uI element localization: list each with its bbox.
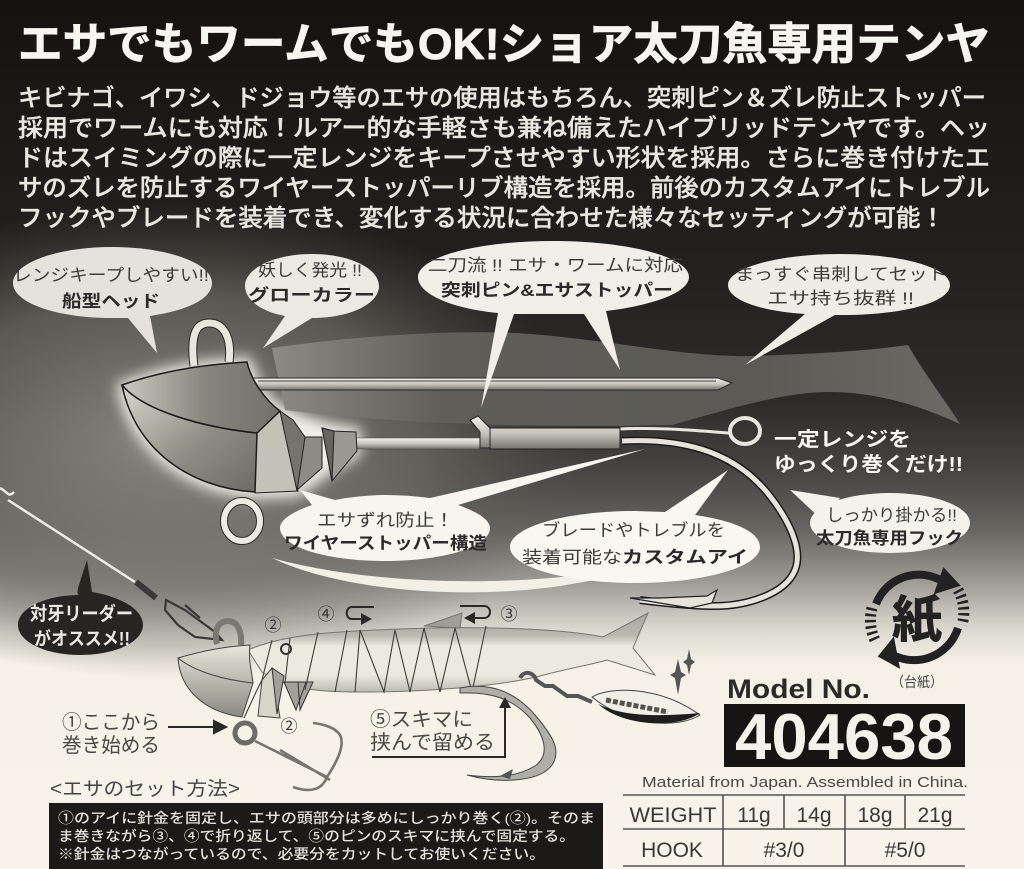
lower eye outline bbox=[224, 501, 260, 541]
callout: straight skewer bbox=[728, 254, 950, 365]
worm silhouette bbox=[272, 332, 960, 426]
lower shaft bbox=[350, 438, 490, 449]
marker ② lower: ② bbox=[280, 717, 298, 736]
marker ④ with turn arrow bbox=[318, 605, 374, 625]
callout: dedicated hook bbox=[790, 490, 970, 553]
arrow: tuck into gap bbox=[372, 697, 511, 757]
leader snap swivel bbox=[165, 600, 222, 640]
leader spring bbox=[136, 582, 156, 598]
hook barb small bbox=[500, 769, 513, 779]
rib keel bbox=[255, 411, 298, 493]
recycle paper mark: （台紙） bbox=[891, 674, 943, 690]
wire stopper sleeve bbox=[470, 416, 620, 449]
callout: range keep head: 船型ヘッド bbox=[62, 292, 160, 311]
callout: wire stopper structure bbox=[280, 449, 645, 561]
recycle paper mark bbox=[870, 570, 964, 690]
description text block: サのズレを防止するワイヤーストッパーリブ構造を採用。前後のカスタムアイにトレブル bbox=[18, 174, 990, 202]
retrieve instruction: 一定レンジを bbox=[774, 428, 911, 451]
lower eye bbox=[224, 501, 260, 541]
small ribs bbox=[272, 668, 313, 714]
wire wrap bbox=[244, 626, 486, 718]
specification table: 11g bbox=[737, 804, 771, 827]
small jig head bbox=[178, 645, 253, 717]
upper line eye bbox=[193, 323, 230, 366]
callout: pin and stopper bbox=[418, 241, 689, 408]
description text block: キビナゴ、イワシ、ドジョウ等のエサの使用はもちろん、突刺ピン＆ズレ防止ストッパー bbox=[18, 85, 986, 112]
jig head top facet bbox=[122, 362, 280, 433]
instruction box: ①のアイに針金を固定し、エサの頭部分は多めにしっかり巻く(②)。そのま bbox=[58, 810, 595, 826]
baitfish body bbox=[248, 613, 655, 692]
callout: range keep head bbox=[13, 247, 212, 353]
jig head lower bbox=[122, 385, 257, 492]
dorsal fin bbox=[424, 613, 462, 628]
callout: wire stopper structure: エサずれ防止！ bbox=[317, 511, 454, 530]
callout: straight skewer: まっすぐ串刺してセット bbox=[735, 265, 947, 284]
keel spine bbox=[297, 437, 322, 490]
note: tuck into gap bbox=[370, 708, 495, 754]
callout: pin and stopper: 二刀流 !! エサ・ワームに対応 bbox=[428, 256, 683, 275]
rib first bbox=[280, 411, 305, 491]
description text block: フックやブレードを装着でき、変化する状況に合わせた様々なセッティングが可能！ bbox=[18, 204, 945, 232]
description text block: ドはスイミングの際に一定レンジをキープさせやすい形状を採用。さらに巻き付けたエ bbox=[18, 145, 990, 172]
treble hook bbox=[255, 723, 342, 790]
model number label: Model No. bbox=[727, 674, 870, 704]
small lower eye bbox=[235, 723, 255, 743]
sparkles bbox=[670, 649, 695, 695]
instruction box: ※針金はつながっているので、必要分をカットしてお使いください。 bbox=[58, 846, 545, 862]
retrieve instruction: ゆっくり巻くだけ!! bbox=[774, 453, 963, 476]
description text block bbox=[18, 85, 990, 232]
blade dark crescent bbox=[598, 704, 700, 723]
callout: custom eye: 装着可能な bbox=[522, 548, 622, 567]
specification table: #3/0 bbox=[764, 839, 804, 862]
description text block: 採用でワームにも対応！ルアー的な手軽さも兼ね備えたハイブリッドテンヤです。ヘッ bbox=[18, 114, 990, 142]
marker ② upper: ② bbox=[264, 616, 282, 635]
callout: dedicated hook: 太刀魚専用フック bbox=[816, 528, 963, 548]
recycle paper mark: 紙 bbox=[892, 592, 942, 648]
specification table: 14g bbox=[796, 804, 832, 827]
rib second bbox=[322, 428, 357, 481]
heading: how to set bait: <エサのセット方法> bbox=[50, 778, 240, 800]
upper line eye highlight bbox=[193, 323, 230, 366]
specification table: HOOK bbox=[641, 839, 703, 862]
retrieve instruction bbox=[774, 428, 963, 476]
wire to custom eye bbox=[620, 428, 730, 433]
callout: pin and stopper: 突刺ピン&エサストッパー bbox=[441, 281, 673, 300]
hook tip and barb bbox=[630, 590, 717, 608]
callout: dedicated hook: しっかり掛かる!! bbox=[826, 506, 957, 525]
callout: custom eye: カスタムアイ bbox=[622, 548, 748, 567]
callout: range keep head: レンジキープしやすい!! bbox=[13, 266, 209, 285]
callout: custom eye: ブレードやトレブルを bbox=[542, 520, 725, 540]
gray wash around jig head bbox=[0, 200, 590, 680]
small keel and ribs bbox=[258, 668, 280, 718]
arrow: start winding bbox=[168, 721, 226, 733]
callout: leader recommendation bbox=[18, 560, 143, 655]
specification table: 21g bbox=[917, 804, 953, 827]
small hook bbox=[460, 686, 556, 780]
marker ③ with turn arrow bbox=[460, 605, 518, 624]
blade bbox=[592, 690, 700, 723]
hook body bbox=[622, 441, 797, 606]
specification table: #5/0 bbox=[885, 839, 925, 862]
custom eye bbox=[730, 418, 760, 444]
note: start winding: ①ここから bbox=[62, 711, 160, 734]
callout: straight skewer: エサ持ち抜群 !! bbox=[767, 289, 914, 308]
title: エサでもワームでもOK!ショア太刀魚専用テンヤ bbox=[18, 20, 990, 69]
callout: glow color: 妖しく発光 !! bbox=[258, 261, 362, 280]
callout: custom eye bbox=[510, 470, 760, 583]
blade swivel bbox=[520, 673, 592, 702]
marker ③ with turn arrow: ③ bbox=[500, 605, 518, 624]
callout: glow color bbox=[245, 254, 379, 348]
stinger pin bbox=[250, 378, 732, 390]
callout: glow color: グローカラー bbox=[248, 285, 375, 305]
small line eye bbox=[216, 621, 241, 645]
bait eye bbox=[281, 644, 291, 654]
instruction box bbox=[49, 803, 603, 869]
note: tuck into gap: ⑤スキマに bbox=[370, 708, 473, 731]
swoosh highlights bbox=[272, 558, 645, 592]
instruction box: ま巻きながら③、④で折り返して、⑤のピンのスキマに挟んで固定する。 bbox=[58, 828, 575, 844]
specification table: 18g bbox=[857, 804, 893, 827]
specification table: WEIGHT bbox=[630, 804, 717, 827]
specification table bbox=[623, 795, 965, 866]
baited rig illustration bbox=[178, 613, 700, 790]
callout: wire stopper structure: ワイヤーストッパー構造 bbox=[284, 534, 487, 553]
white halo around jig bbox=[122, 362, 356, 494]
jig illustration bbox=[122, 323, 797, 608]
note: tuck into gap: 挟んで留める bbox=[370, 731, 495, 754]
pin groove bbox=[258, 380, 716, 382]
blade logo pattern bbox=[606, 700, 668, 712]
callout: leader recommendation: がオススメ!! bbox=[34, 628, 130, 649]
note: start winding: 巻き始める bbox=[62, 734, 160, 757]
leader line bbox=[0, 488, 135, 582]
model number box: 404638 bbox=[735, 700, 953, 773]
note: start winding bbox=[62, 711, 160, 757]
origin line: Material from Japan. Assembled in China. bbox=[642, 775, 968, 791]
hook shadow bbox=[622, 441, 797, 606]
callout: leader recommendation: 対牙リーダー bbox=[30, 602, 133, 625]
small head facet line bbox=[178, 658, 253, 683]
rib second spine bbox=[322, 428, 334, 481]
marker ④ with turn arrow: ④ bbox=[318, 605, 334, 624]
